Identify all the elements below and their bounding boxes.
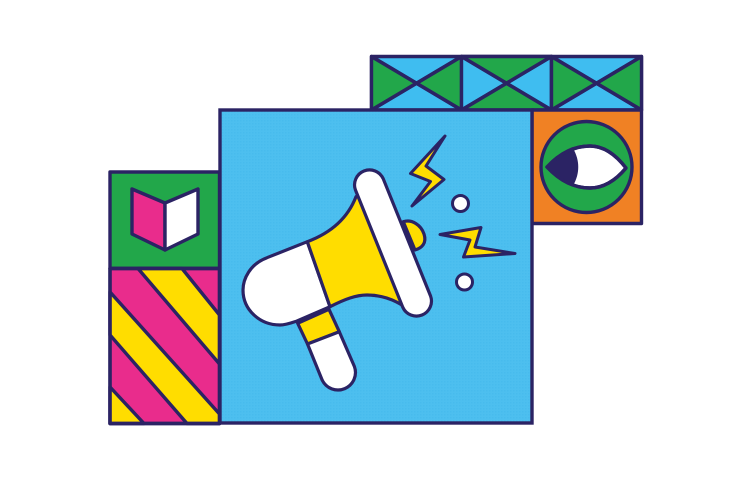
banner cell 3 <box>552 56 642 110</box>
icon: megaphone <box>243 170 431 390</box>
bell rim <box>355 170 431 316</box>
icon: lightning bolt right <box>440 228 515 257</box>
panel: top banner with crossed triangles <box>372 56 642 110</box>
banner cell 1 <box>372 56 462 110</box>
panel: main blue square <box>220 110 532 423</box>
icon: dot upper <box>452 196 468 212</box>
banner cell 2 <box>462 56 552 110</box>
handle <box>298 309 355 390</box>
icon: dot lower <box>456 274 472 290</box>
rear body <box>243 242 330 325</box>
icon: open book <box>132 189 198 250</box>
panel: diagonal stripes <box>110 268 220 424</box>
yellow bell <box>307 190 412 307</box>
icon: eye <box>541 122 632 212</box>
panel: book on green <box>110 172 220 268</box>
rear bump <box>403 221 425 250</box>
panel: eye on orange <box>532 110 642 224</box>
icon: lightning bolt top <box>410 136 445 206</box>
